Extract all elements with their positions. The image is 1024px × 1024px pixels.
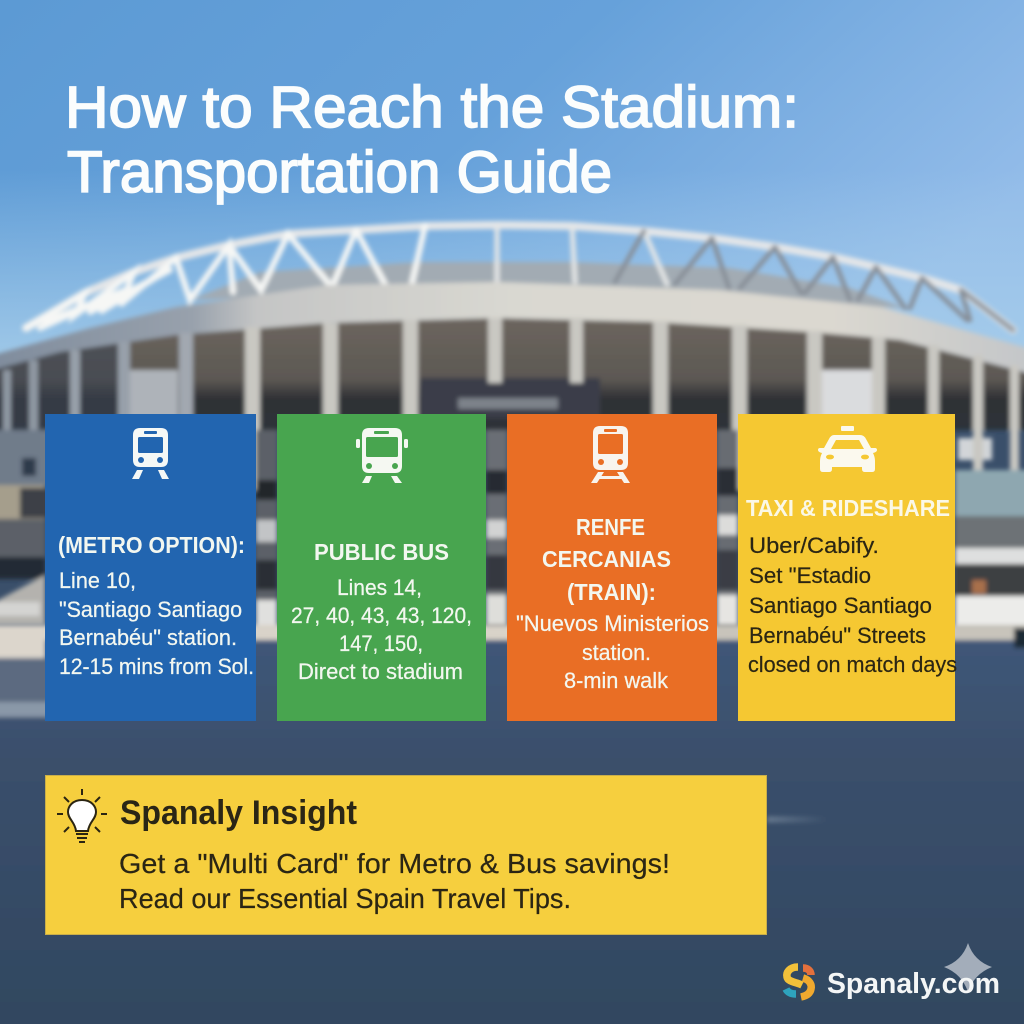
taxi text: Santiago Santiago [749,593,932,618]
taxi text: Bernabéu" Streets [749,623,926,648]
plaza ground [0,625,1024,1024]
brand name: Spanaly.com [827,968,1000,1000]
sky [0,0,1024,420]
logo: Spanaly.com [786,967,1000,1000]
title: Transportation Guide [67,140,612,205]
metro text [58,532,254,679]
columns [3,318,1019,491]
stadium building [0,225,1024,635]
concrete roof band [0,282,1024,380]
callout: Spanaly Insight [46,776,766,934]
icon: Spanaly logo mark [786,967,811,997]
taxi text: Uber/Cabify. [749,533,879,558]
taxi text: closed on match days [748,652,957,677]
taxi heading: TAXI & RIDESHARE [746,495,950,521]
panel: taxi and rideshare [738,414,957,721]
insight text [119,848,670,914]
title: How to Reach the Stadium: [65,75,799,140]
panel: renfe cercanias train [507,414,717,721]
icon: taxi [818,426,877,472]
bus text: Direct to stadium [298,659,463,684]
lower stadium levels [0,430,1024,635]
stadium sign [420,378,600,418]
metro text: (METRO OPTION): [58,532,245,558]
metro text: Line 10, [59,568,136,593]
metro text: "Santiago Santiago [59,597,242,622]
recessed concourse [0,318,1024,430]
bus text: 147, 150, [339,631,423,656]
title [65,75,799,205]
bus text: PUBLIC BUS [314,539,449,565]
train text: CERCANIAS [542,546,671,572]
taxi text: Set "Estadio [749,563,871,588]
train text: "Nuevos Ministerios [516,611,709,636]
train text: RENFE [576,514,645,540]
metro text: Bernabéu" station. [59,625,237,650]
icon: metro train [132,428,169,479]
icon: bus [356,428,408,483]
icon: light bulb [57,789,107,842]
train text: station. [582,640,651,665]
train text: (TRAIN): [567,579,656,605]
panel: metro option [45,414,256,721]
bus text: 27, 40, 43, 43, 120, [291,603,472,628]
panel: public bus [277,414,486,721]
white wall blocks [130,370,992,460]
insight text: Read our Essential Spain Travel Tips. [119,883,571,914]
taxi text [748,533,957,677]
stands behind the roof [190,262,905,308]
train text: 8-min walk [564,668,669,693]
roof truss [26,225,1013,330]
insight heading: Spanaly Insight [120,794,357,832]
metro text: 12-15 mins from Sol. [59,654,254,679]
train text [516,514,709,693]
insight text: Get a "Multi Card" for Metro & Bus savings! [119,848,670,879]
icon: train [591,426,630,483]
bus text [291,539,472,684]
bus text: Lines 14, [337,575,422,600]
icon: sparkle watermark [944,943,992,992]
